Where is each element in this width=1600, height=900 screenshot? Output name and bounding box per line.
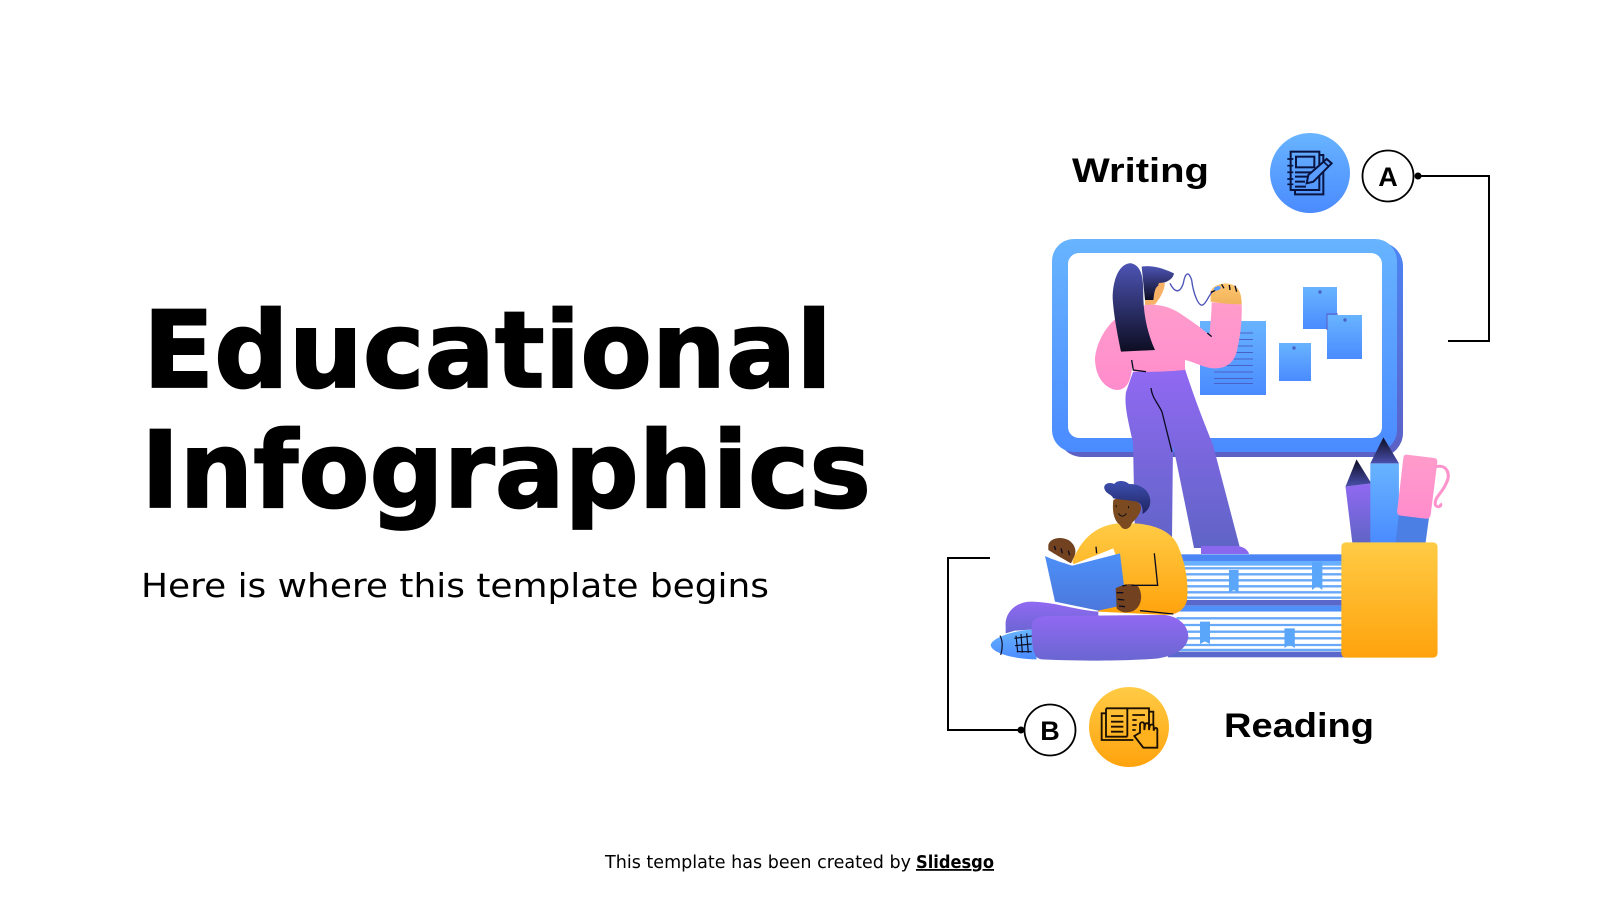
label: writing: Writing bbox=[1072, 152, 1209, 190]
title: Infographics bbox=[141, 409, 871, 532]
title bbox=[141, 289, 871, 532]
icon: writing notebook badge bbox=[1270, 133, 1350, 213]
badge: B bbox=[1024, 704, 1076, 756]
title: Educational bbox=[143, 289, 832, 412]
illustration: book stack bbox=[1168, 554, 1345, 657]
subtitle: Here is where this template begins bbox=[141, 566, 769, 605]
illustration: notes on board bbox=[1200, 287, 1362, 395]
label: reading: Reading bbox=[1224, 707, 1374, 745]
icon: reading book badge bbox=[1089, 687, 1169, 767]
badge: B: B bbox=[1040, 716, 1060, 746]
connector: B to reader bbox=[948, 558, 1024, 734]
illustration: pencil cup bbox=[1341, 437, 1448, 658]
illustration: woman writing bbox=[1095, 263, 1249, 554]
illustration: whiteboard bbox=[1052, 239, 1403, 457]
badge: A: A bbox=[1378, 162, 1398, 192]
badge: A bbox=[1362, 150, 1414, 202]
connector: A to board bbox=[1414, 172, 1489, 341]
illustration: boy reading bbox=[991, 481, 1188, 661]
footer credit: This template has been created by bbox=[604, 852, 911, 873]
footer credit: Slidesgo bbox=[916, 852, 994, 873]
